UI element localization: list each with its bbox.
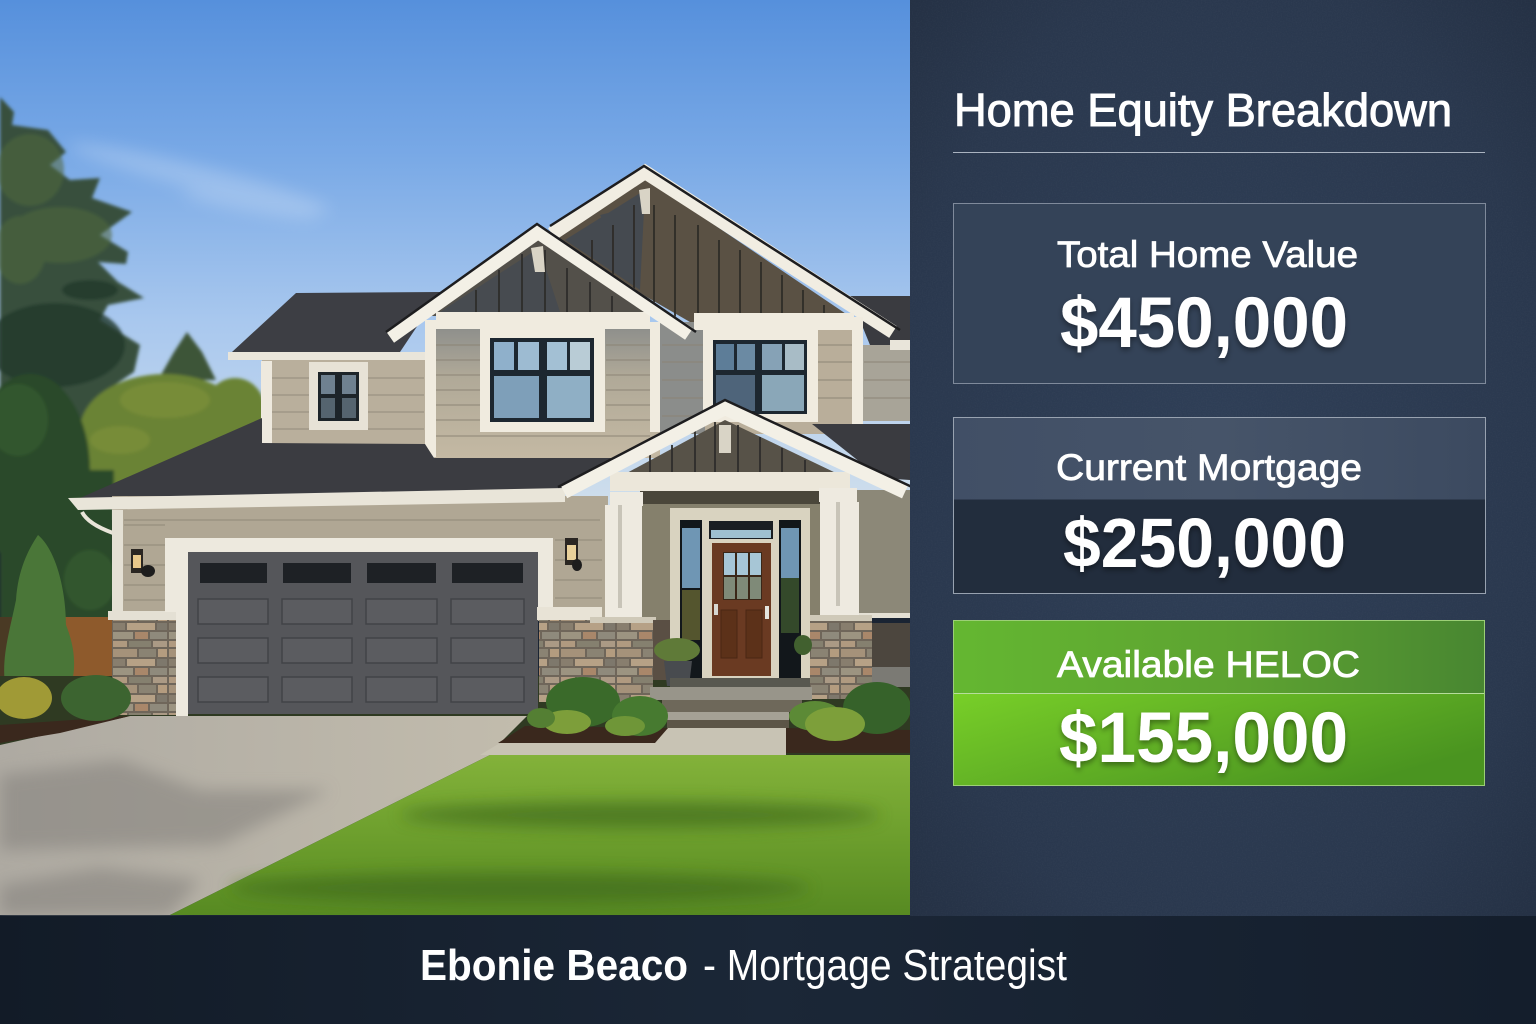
siding lines — [436, 345, 910, 436]
potted plant — [654, 638, 700, 686]
left front gable — [386, 224, 696, 457]
porch steps — [650, 678, 812, 728]
lower wall — [112, 496, 608, 621]
tall tree — [0, 97, 144, 480]
sky — [0, 0, 910, 520]
right eave and window — [694, 313, 863, 433]
entry door surround — [670, 508, 810, 678]
heading: Home Equity Breakdown: Home Equity Breakdown — [954, 84, 1452, 136]
upper centre wall — [434, 322, 660, 458]
column shading — [620, 502, 838, 608]
dark left tree — [0, 374, 114, 620]
lower roof — [80, 418, 640, 498]
house photo illustration — [0, 0, 912, 915]
right back roof — [850, 296, 910, 345]
footer bar — [0, 916, 1536, 1024]
mulch beds — [0, 716, 910, 753]
porch gable — [558, 400, 912, 492]
garage windows — [200, 563, 523, 583]
panel grain — [910, 0, 1536, 916]
card: available HELOC — [953, 620, 1485, 786]
card: current mortgage: $250,000 — [1063, 504, 1346, 582]
footer bar: - Mortgage Strategist — [703, 941, 1067, 990]
distant conifer — [158, 332, 216, 380]
wall lantern left — [131, 549, 155, 577]
left stone base — [112, 620, 178, 715]
card: available HELOC: Available HELOC — [1057, 644, 1360, 685]
porch columns — [605, 488, 859, 618]
stone column bases — [539, 615, 910, 702]
footer bar: Ebonie Beaco — [420, 941, 688, 990]
wispy clouds — [66, 134, 334, 224]
right tall gable — [548, 166, 900, 332]
fence — [0, 617, 112, 677]
downspout — [82, 512, 113, 533]
upper back roof — [232, 292, 440, 352]
right potted plant — [794, 635, 812, 655]
ground base — [0, 676, 910, 760]
driveway — [0, 716, 527, 915]
lower wall siding — [124, 520, 602, 600]
conifer shrub — [4, 535, 74, 690]
lawn — [170, 755, 910, 915]
upper left wall — [228, 352, 434, 446]
card: total home value: Total Home Value — [1057, 234, 1358, 275]
card: current mortgage — [954, 418, 1486, 594]
left corner trim and sill — [108, 510, 178, 620]
upper right wall — [660, 322, 910, 434]
garage right sill — [537, 607, 602, 620]
olive trees — [80, 374, 265, 495]
card: available HELOC: $155,000 — [1059, 699, 1348, 778]
shrubs — [0, 675, 911, 741]
lawn shadows — [230, 802, 880, 903]
wall lantern right — [565, 538, 582, 571]
card: total home value: $450,000 — [1060, 284, 1348, 363]
card: current mortgage: Current Mortgage — [1056, 447, 1362, 488]
card: total home value — [954, 204, 1486, 384]
lower eave trim — [68, 488, 565, 510]
porch wall — [640, 488, 910, 623]
right lower roof — [812, 424, 910, 480]
upper left window — [309, 362, 368, 430]
centre window — [480, 328, 605, 432]
right panel background — [910, 0, 1536, 916]
driveway shadows — [0, 760, 330, 915]
garage door — [165, 538, 553, 716]
background trees — [0, 97, 265, 620]
front door — [712, 543, 771, 676]
walkway — [480, 728, 786, 755]
